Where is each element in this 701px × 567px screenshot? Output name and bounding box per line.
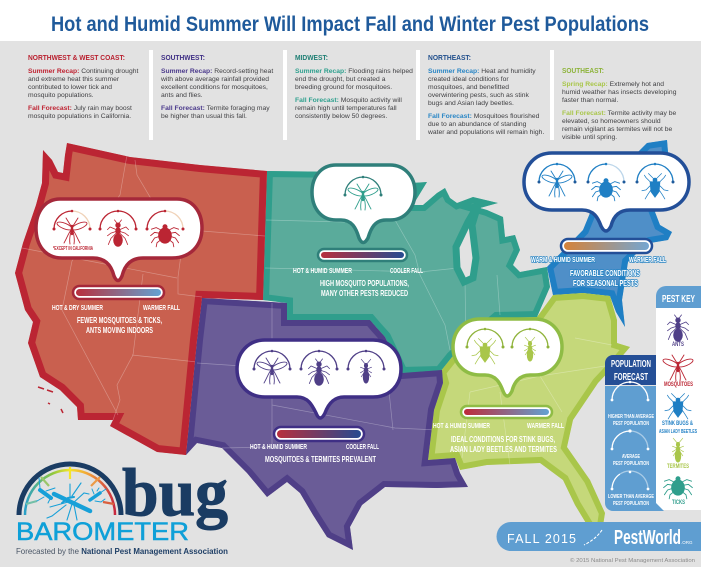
labels: midwest: MANY OTHER PESTS REDUCED [321,288,408,298]
text block: midwest: MIDWEST: [295,55,328,62]
labels: midwest: HIGH MOSQUITO POPULATIONS, [320,278,409,288]
logo: bug barometer [16,454,228,556]
text block: northwest and west coast: Summer Recap: Continuing drought [28,68,138,75]
region: northeast map [547,140,678,327]
key: ants [667,315,689,348]
text block: southwest: with above average rainfall provided [160,76,269,83]
labels: midwest: COOLER FALL [390,266,423,275]
panel: pest key [656,286,701,510]
text block: northwest and west coast: NORTHWEST & WEST COAST: [28,55,125,62]
bubble: northeast pests [524,153,689,231]
text block: northwest and west coast: and extreme heat this summer [28,76,120,83]
labels: southeast: HOT & HUMID SUMMER [433,421,490,430]
text block: northwest and west coast: mosquito populations. [28,92,94,99]
key: ticks: TICKS [672,499,685,506]
logo gauge arc [19,464,121,515]
text block: midwest [295,55,413,120]
copyright: © 2015 National Pest Management Association [570,557,695,564]
gauge: lower than average [608,471,654,507]
labels: northwest: WARMER FALL [143,303,180,312]
logo: bug barometer: Forecasted by the National Pest Management Association [16,547,228,556]
text block: midwest: Summer Recap: Flooding rains helped [295,68,413,75]
panel: population forecast [605,355,664,511]
bubble: northwest pests [36,199,202,280]
key: ticks [664,477,692,506]
text block: northwest and west coast: Fall Forecast: July rain may boost [28,105,132,112]
temperature bar: southwest [274,427,364,441]
gauge: mosquito high [344,176,382,210]
text block: southeast: visible until spring. [562,134,617,141]
labels: southwest [250,442,379,464]
text block: northeast: overwintering pests, such as stink [428,92,530,99]
text block: northeast: Fall Forecast: Mosquitoes flourished [428,113,540,120]
text block: southeast: Spring Recap: Extremely hot and [562,81,664,88]
note: except in California: *EXCEPT IN CALIFORNIA [53,246,93,252]
temperature bar: southeast [461,406,552,418]
region: northwest and west map [15,143,267,455]
gauge: mosquito high [538,163,576,197]
text block: southeast: Fall Forecast: Termite activity may be [562,110,677,117]
text block: midwest: Fall Forecast: Mosquito activity will [295,97,402,104]
text block: southeast: SOUTHEAST: [562,68,604,75]
region: southeast map [428,293,630,533]
text block: southwest: excellent conditions for mosquitoes, [161,84,268,91]
labels: midwest [293,266,423,298]
region: midwest map [263,171,550,373]
gauge: termite high [346,350,386,383]
gauge: higher than average: PEST POPULATION [613,421,649,427]
lake michigan [456,205,478,282]
gauge: tick average [146,210,184,247]
labels: northeast: WARMER FALL [629,255,666,264]
gauge: higher than average [608,381,654,427]
text block: southwest: be higher than usual this fall. [161,113,247,120]
gauge: termite high [510,328,550,361]
labels: northeast: FOR SEASONAL PESTS [573,278,638,288]
text block: northwest and west coast: mosquito populations in California. [28,113,131,120]
panel: fall 2015 banner [496,522,701,551]
gauge: lower than average: LOWER THAN AVERAGE [608,494,654,500]
panel: fall 2015 banner: .ORG [681,540,693,545]
text block: southwest [160,55,273,120]
text block: southeast: faster than normal. [562,97,618,104]
gauge: ant high [300,350,338,385]
text block: southeast: remain vigilant as termites will not be [562,126,673,133]
key: termites [667,438,689,470]
labels: northwest: HOT & DRY SUMMER [52,303,103,312]
text block: southwest: ants and flies. [161,92,203,99]
bubble: southwest pests [237,340,401,418]
gauge: average [611,429,649,467]
bubble: midwest pests [312,165,415,242]
region: southwest map [186,298,468,550]
labels: southeast: IDEAL CONDITIONS FOR STINK BUGS, [451,434,555,444]
key: termites: TERMITES [667,463,689,470]
text block: midwest: end the drought, but created a [295,76,386,83]
title banner [0,0,701,41]
text block: northeast: NORTHEAST: [428,55,471,62]
gauge: stink bug high [466,328,504,364]
labels: northwest [52,303,180,335]
panel: fall 2015 banner: FALL 2015 [507,532,576,546]
labels: northeast: WARM & HUMID SUMMER [531,255,595,264]
key: mosquitoes [662,355,694,388]
text block: northeast: mosquitoes, and benefitted [428,84,509,91]
panel: population forecast: POPULATION [611,359,651,370]
labels: southeast [433,421,564,454]
text block: southwest: Fall Forecast: Termite foraging may [161,105,270,112]
key: stink bugs and asian lady beetles [659,394,697,435]
text block: midwest: consistently below 50 degrees. [295,113,387,120]
labels: northwest: FEWER MOSQUITOES & TICKS, [77,315,162,325]
logo ant [90,488,106,502]
text block: northeast [427,55,544,136]
labels: southwest: HOT & HUMID SUMMER [250,442,307,451]
gauge: average: PEST POPULATION [613,461,649,467]
temperature bar: midwest [318,249,407,261]
logo cockroach [37,478,55,503]
key: ants: ANTS [672,341,684,348]
labels: southeast: WARMER FALL [527,421,564,430]
labels: southwest: COOLER FALL [346,442,379,451]
gauge: higher than average: HIGHER THAN AVERAGE [608,414,654,420]
text block: northeast: bugs and Asian lady beetles. [428,100,514,107]
labels: northeast [531,255,666,288]
logo mosquito [47,483,90,520]
text block: northeast: due to an abundance of standing [428,121,527,128]
labels: southeast: ASIAN LADY BEETLES AND TERMITES [450,444,557,454]
labels: midwest: HOT & HUMID SUMMER [293,266,352,275]
bubble: southeast pests [453,319,562,396]
text block: northeast: created ideal conditions for [428,76,509,83]
gauge: average: AVERAGE [622,454,640,460]
gauge: stink bug high [636,163,674,199]
text block: southwest: SOUTHWEST: [161,55,205,62]
gauge: lower than average: PEST POPULATION [613,501,649,507]
text block: northwest and west coast [28,55,138,120]
text block: northwest and west coast: contributed to lower tick and [28,84,112,91]
labels: northeast: FAVORABLE CONDITIONS [570,268,640,278]
temperature bar: northeast [561,239,652,253]
gauge: mosquito average [52,210,92,244]
text block: midwest: remain high until temperatures fall [295,105,397,112]
gauge: ant high [98,210,138,246]
text block: southeast: elevated, so homeowners should [562,118,661,125]
panel: population forecast: FORECAST [614,372,648,383]
text block: northeast: Summer Recap: Heat and humidity [428,68,536,75]
text block: midwest: breeding ground for mosquitoes. [295,84,392,91]
labels: southwest: MOSQUITOES & TERMITES PREVALENT [265,454,377,464]
text block: northeast: water and populations will remain high. [427,129,544,136]
gauge: tick average [586,163,626,201]
text block: southeast [562,68,677,141]
logo: bug barometer: BAROMETER [16,518,189,546]
text block: southwest: Summer Recap: Record-setting heat [161,68,273,75]
logo: bug barometer: bug [122,454,228,530]
gauge: mosquito high [252,350,292,384]
temperature bar: northwest [73,286,164,299]
channel islands [38,387,63,413]
text block: southeast: humid weather has insects developing [562,89,677,96]
labels: northwest: ANTS MOVING INDOORS [86,325,153,335]
